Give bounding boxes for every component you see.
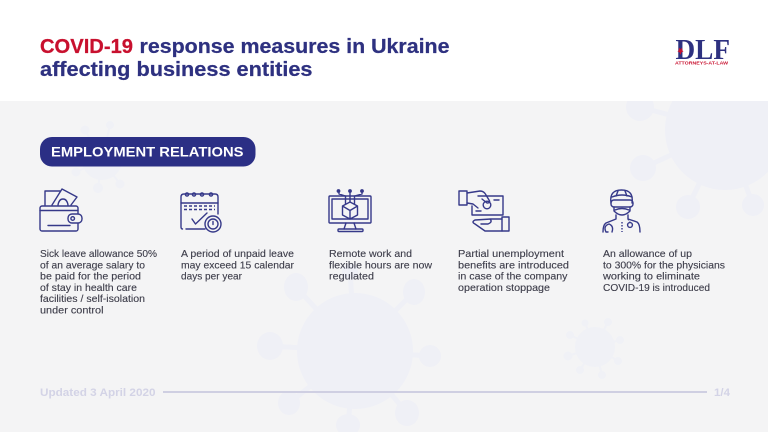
icon: wallet — [40, 189, 82, 231]
title: COVID-19 — [40, 36, 133, 58]
text: remote work — [329, 249, 433, 283]
text: sick leave allowance: under control — [40, 306, 104, 316]
title: response measures in Ukraine — [140, 36, 450, 58]
icon: hand giving money — [459, 191, 509, 231]
header band — [0, 0, 768, 101]
footer — [40, 387, 731, 399]
text: unpaid leave — [181, 249, 295, 283]
text: sick leave allowance: be paid for the period — [40, 272, 141, 283]
icon: calendar with clock — [181, 193, 221, 232]
virus backdrop: top right — [626, 70, 768, 219]
logo: DLF: DLF — [676, 34, 730, 66]
text: physicians allowance: An allowance of up — [603, 249, 692, 260]
virus backdrop: small right — [564, 318, 624, 379]
text: remote work: flexible hours are now — [329, 260, 433, 271]
title — [40, 36, 450, 81]
logo: DLF: ATTORNEYS-AT-LAW — [675, 60, 729, 66]
virus backdrop: behind heading pill — [72, 121, 132, 193]
icon: monitor with cube — [329, 190, 371, 232]
heading pill: employment relations — [40, 137, 256, 166]
text: sick leave allowance — [40, 249, 157, 316]
icon: doctor — [603, 190, 640, 232]
text: unpaid leave: may exceed 15 calendar — [181, 260, 295, 271]
text: physicians allowance — [602, 249, 725, 294]
text: partial unemployment — [458, 249, 569, 294]
text: unpaid leave: days per year — [181, 272, 243, 283]
text: sick leave allowance: Sick leave allowance 50% — [40, 249, 157, 260]
text: physicians allowance: working to eliminate — [602, 272, 700, 283]
footer: 1/4 — [714, 387, 731, 399]
text: physicians allowance: COVID-19 is introduced — [603, 283, 710, 294]
text: remote work: Remote work and — [329, 249, 412, 260]
text: physicians allowance: to 300% for the physicians — [603, 260, 725, 271]
text: partial unemployment: operation stoppage — [458, 283, 550, 294]
text: sick leave allowance: facilities / self-isolation — [40, 294, 145, 305]
text: partial unemployment: in case of the company — [458, 272, 568, 283]
footer: Updated 3 April 2020 — [40, 387, 156, 399]
text: partial unemployment: benefits are introduced — [458, 260, 569, 271]
virus backdrop: large centre — [257, 264, 441, 432]
text: sick leave allowance: of stay in health care — [40, 283, 137, 294]
text: partial unemployment: Partial unemployment — [458, 249, 564, 260]
title: affecting business entities — [40, 59, 312, 81]
text: sick leave allowance: of an average salary to — [40, 260, 145, 271]
text: unpaid leave: A period of unpaid leave — [181, 249, 294, 260]
text: remote work: regulated — [329, 272, 374, 283]
heading pill: employment relations: EMPLOYMENT RELATIONS — [51, 144, 244, 160]
